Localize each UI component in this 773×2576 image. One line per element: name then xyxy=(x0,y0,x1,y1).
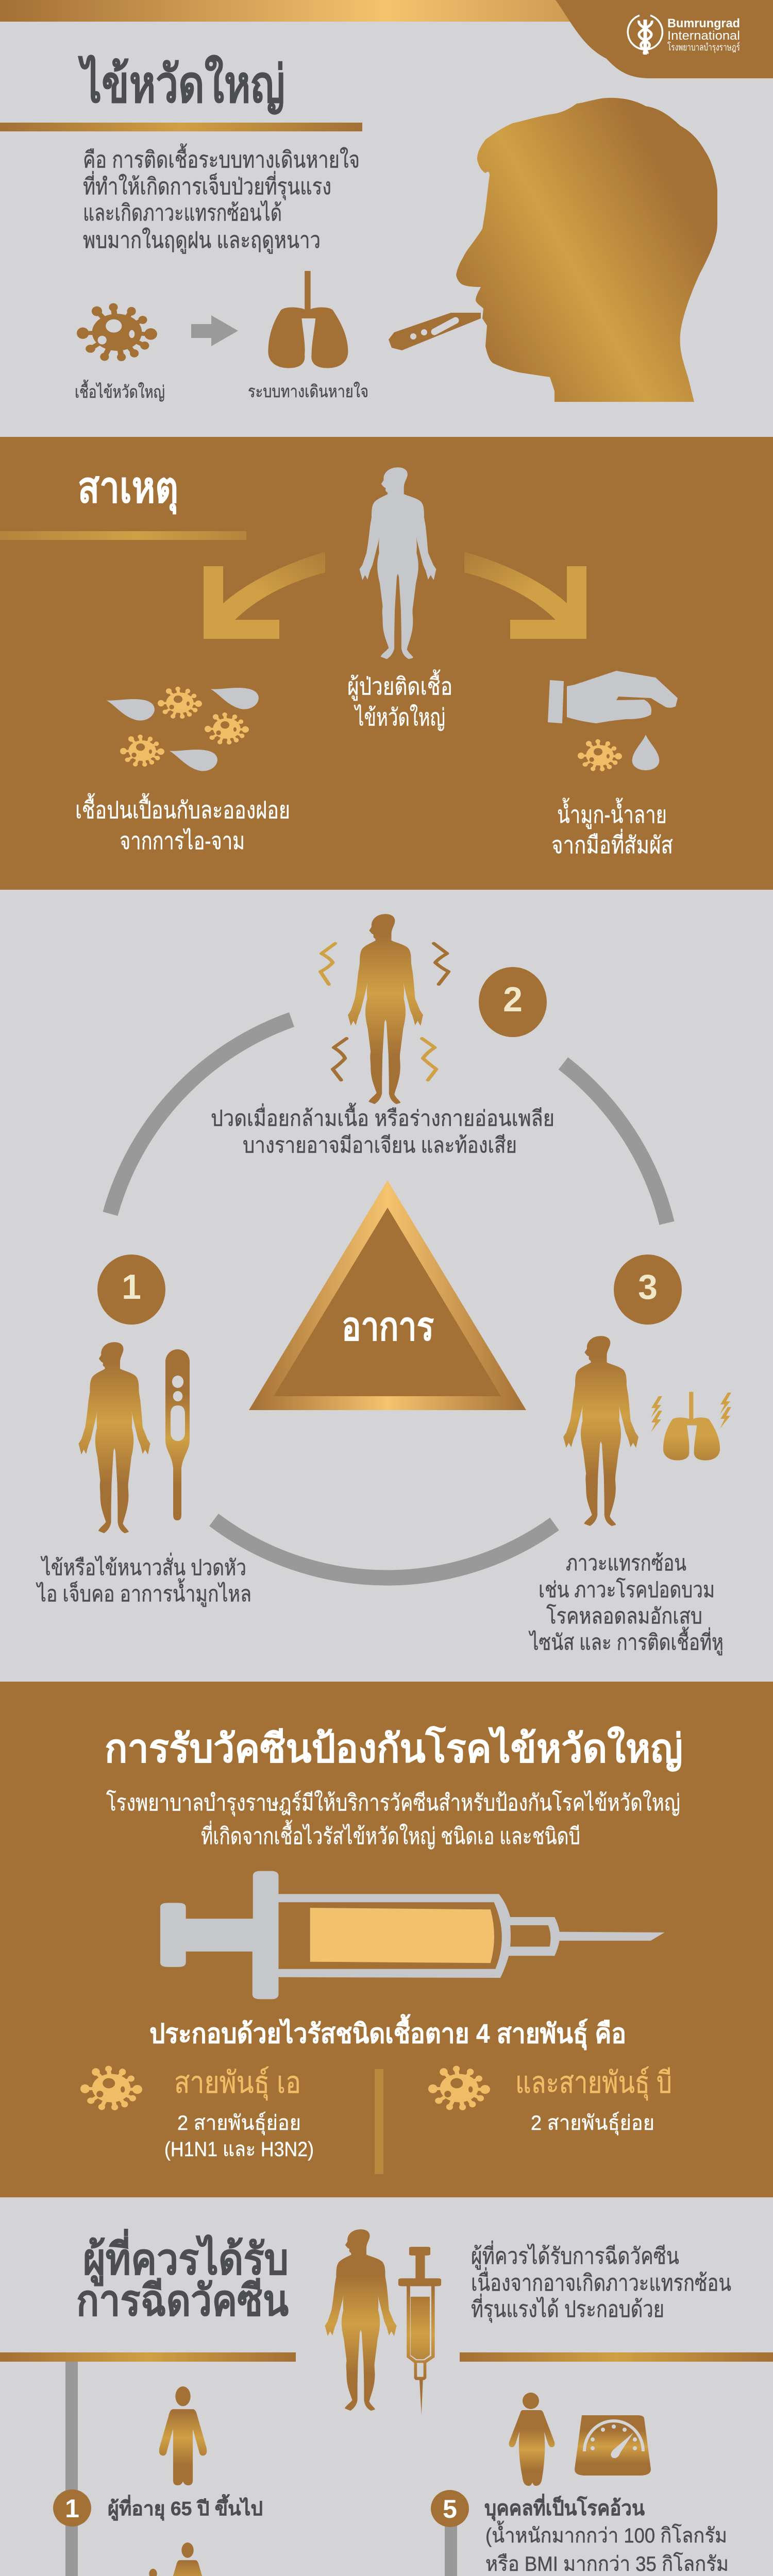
heading: who should be vaccinated: การฉีดวัคซีน xyxy=(76,2276,289,2325)
text: strain A: 2 สายพันธุ์ย่อย xyxy=(177,2111,301,2136)
text: who intro: ผู้ที่ควรได้รับการฉีดวัคซีน xyxy=(471,2240,679,2270)
icon: droplets and viruses xyxy=(101,680,263,774)
label: virus: เชื้อไข้หวัดใหญ่ xyxy=(75,380,165,401)
logo text: Bumrungrad xyxy=(667,16,740,30)
panel: symptoms ring xyxy=(110,1020,667,1578)
badge: 3 xyxy=(614,1255,682,1325)
text: composition: ประกอบด้วยไวรัสชนิดเชื้อตาย 4 สายพันธุ์ คือ xyxy=(149,2014,626,2050)
arrow: right xyxy=(464,552,586,639)
icon: lungs xyxy=(268,271,348,368)
text: strain A: สายพันธุ์ เอ xyxy=(174,2066,301,2101)
panel: vaccination xyxy=(0,1682,773,2197)
badge: 1: 1 xyxy=(122,1267,141,1307)
icon: hand with virus and drop xyxy=(548,671,678,771)
text: symptom 3: ไซนัส และ การติดเชื้อที่หู xyxy=(529,1626,724,1655)
icon: symptom 3 person with lungs xyxy=(563,1336,731,1526)
text: symptom 3 xyxy=(529,1551,724,1655)
badge 1: 1 xyxy=(65,2494,79,2523)
text: symptom 1 xyxy=(36,1553,251,1607)
badge: 2: 2 xyxy=(503,980,523,1019)
heading: who should be vaccinated: ผู้ที่ควรได้รับ xyxy=(83,2229,289,2286)
icon: elderly xyxy=(159,2386,207,2485)
badge 1 xyxy=(53,2489,91,2527)
ache lines xyxy=(321,943,449,1080)
heading rule xyxy=(0,531,246,540)
text: strain A: (H1N1 และ H3N2) xyxy=(164,2138,314,2161)
icon: symptom 1 person with thermometer xyxy=(78,1342,190,1533)
icon: logo emblem xyxy=(628,15,662,55)
text: symptom 3: ภาวะแทรกซ้อน xyxy=(566,1551,686,1575)
text: droplets xyxy=(75,793,290,854)
text: strain A xyxy=(164,2066,314,2161)
arrow xyxy=(191,315,238,346)
arrow: left xyxy=(204,552,325,639)
text block: definition xyxy=(83,143,360,254)
icon: person xyxy=(360,467,436,659)
text block: definition: คือ การติดเชื้อระบบทางเดินหายใจ xyxy=(83,143,360,173)
text 5: (น้ำหนักมากกว่า 100 กิโลกรัม xyxy=(485,2520,727,2547)
badge: 3: 3 xyxy=(638,1267,658,1307)
text: symptom 2 xyxy=(211,1103,554,1157)
text: vaccination intro: ที่เกิดจากเชื้อไวรัสไข้หวัดใหญ่ ชนิดเอ และชนิดบี xyxy=(201,1820,580,1849)
text block: definition: และเกิดภาวะแทรกซ้อนได้ xyxy=(83,200,282,226)
icon: head with thermometer xyxy=(389,98,717,402)
item 5 xyxy=(431,2393,729,2576)
badge 5: 5 xyxy=(443,2495,457,2523)
text: symptom 2: บางรายอาจมีอาเจียน และท้องเสีย xyxy=(243,1133,517,1157)
text: hand contact: น้ำมูก-น้ำลาย xyxy=(557,798,667,829)
text: hand contact xyxy=(551,798,673,858)
badge 5 xyxy=(431,2490,469,2527)
icon: syringe xyxy=(160,1871,664,1999)
text: who intro xyxy=(471,2240,731,2323)
text: strain B xyxy=(515,2066,672,2136)
panel: causes xyxy=(0,437,773,890)
thermometer xyxy=(165,1349,190,1520)
triangle: symptoms xyxy=(249,1180,526,1410)
text: hand contact: จากมือที่สัมผัส xyxy=(551,828,673,858)
label: respiratory: ระบบทางเดินหายใจ xyxy=(248,382,368,401)
text: strain B: และสายพันธุ์ บี xyxy=(515,2066,672,2101)
badge: 2 xyxy=(479,967,547,1037)
text: symptom 3: เช่น ภาวะโรคปอดบวม xyxy=(539,1577,715,1602)
title: ไข้หวัดใหญ่ xyxy=(78,55,285,115)
heading: who should be vaccinated xyxy=(76,2229,289,2325)
text: patient: ผู้ป่วยติดเชื้อ xyxy=(347,669,452,701)
item 2 xyxy=(53,2543,234,2576)
icon: virus A xyxy=(80,2066,142,2110)
icon: thermometer xyxy=(389,313,481,350)
rules xyxy=(0,2352,773,2362)
lungs with zaps xyxy=(651,1392,731,1460)
text block: definition: พบมากในฤดูฝน และฤดูหนาว xyxy=(83,227,321,254)
text: droplets: จากการไอ-จาม xyxy=(120,827,245,854)
badge: 1 xyxy=(97,1255,165,1325)
icon: person with syringe xyxy=(325,2229,441,2415)
logo text: International xyxy=(667,29,740,43)
text: who intro: ที่รุนแรงได้ ประกอบด้วย xyxy=(471,2293,664,2323)
text: symptom 3: โรคหลอดลมอักเสบ xyxy=(546,1603,702,1628)
heading: symptoms: อาการ xyxy=(342,1305,434,1349)
text: strain B: 2 สายพันธุ์ย่อย xyxy=(531,2111,654,2136)
text: symptom 1: ไอ เจ็บคอ อาการน้ำมูกไหล xyxy=(36,1578,251,1607)
text block: definition: ที่ทำให้เกิดการเจ็บป่วยที่รุนแรง xyxy=(83,171,331,200)
icon: obese person and scale xyxy=(509,2393,651,2486)
heading: vaccination: การรับวัคซีนป้องกันโรคไข้หวัดใหญ่ xyxy=(105,1725,683,1772)
item 1 xyxy=(53,2386,263,2527)
logo text xyxy=(667,16,740,54)
logo panel xyxy=(556,0,773,78)
timeline track xyxy=(72,2362,451,2576)
text: vaccination intro xyxy=(106,1790,680,1849)
text: patient: ไข้หวัดใหญ่ xyxy=(354,704,445,731)
text 1: ผู้ที่อายุ 65 ปี ขึ้นไป xyxy=(108,2494,263,2521)
icon: adult and child xyxy=(141,2543,207,2576)
icon: virus B xyxy=(428,2066,490,2110)
text: symptom 2: ปวดเมื่อยกล้ามเนื้อ หรือร่างกายอ่อนเพลีย xyxy=(211,1103,554,1130)
heading: causes: สาเหตุ xyxy=(78,463,178,515)
icon: influenza virus xyxy=(77,303,157,361)
text 5: หรือ BMI มากกว่า 35 กิโลกรัม xyxy=(485,2552,729,2575)
icon: symptom 2 aching person xyxy=(321,914,449,1104)
text: patient xyxy=(347,669,452,731)
text 5 xyxy=(484,2494,729,2576)
text 5: บุคคลที่เป็นโรคอ้วน xyxy=(484,2494,645,2521)
text: symptom 1: ไข้หรือไข้หนาวสั่น ปวดหัว xyxy=(40,1553,246,1580)
panel: top header strip xyxy=(0,0,773,22)
text: droplets: เชื้อปนเปื้อนกับละอองฝอย xyxy=(75,793,290,823)
logo text: โรงพยาบาลบำรุงราษฎร์ xyxy=(667,41,740,54)
divider xyxy=(375,2069,383,2174)
title rule xyxy=(0,123,362,131)
